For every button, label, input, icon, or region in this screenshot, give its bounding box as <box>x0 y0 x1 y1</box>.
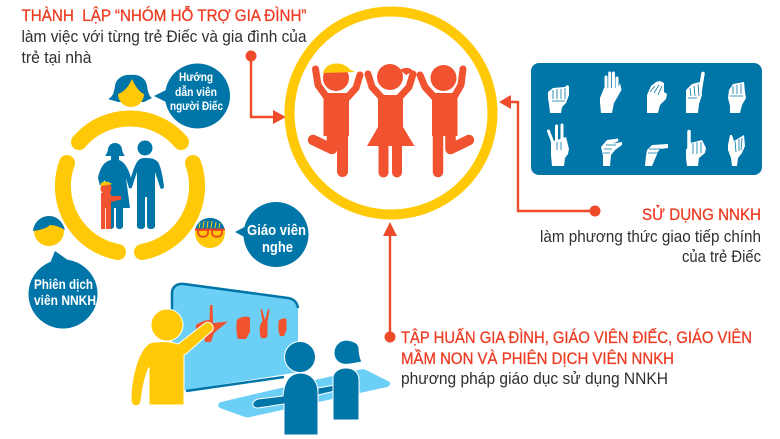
text: training: phương pháp giáo dục sử dụng NNKH <box>401 370 668 388</box>
heading: support group: THÀNH LẬP “NHÓM HỖ TRỢ GIA ĐÌNH” <box>22 6 307 25</box>
speech bubble: viên NNKH <box>34 292 96 308</box>
heading: support group: làm việc với từng trẻ Điếc và gia đình của <box>22 28 307 46</box>
panel: sign language hands <box>531 63 762 175</box>
text: use sign language <box>540 205 761 266</box>
child figure <box>100 182 121 229</box>
training scene <box>131 284 390 435</box>
arrow: training to children <box>383 222 397 342</box>
finger details <box>552 84 743 154</box>
text: use sign language: làm phương thức giao tiếp chính <box>540 228 761 246</box>
speech bubble: Giáo viên <box>247 222 306 239</box>
text: use sign language: của trẻ Điếc <box>682 248 761 266</box>
board <box>172 284 298 392</box>
person: hearing teacher with speech bubble <box>195 202 308 267</box>
child with cap <box>313 63 360 172</box>
yellow teacher <box>131 309 213 406</box>
text: training: MẦM NON VÀ PHIÊN DỊCH VIÊN NNKH <box>401 349 674 368</box>
blue student <box>253 342 335 435</box>
arrow: support group to children <box>246 50 286 124</box>
icon: signs on board <box>196 305 286 342</box>
heading: support group <box>22 6 307 67</box>
speech bubble: Hướng <box>179 72 213 84</box>
speech bubble: dẫn viên <box>175 86 217 99</box>
person: deaf instructor with speech bubble <box>108 64 230 128</box>
girl <box>367 64 414 172</box>
speech bubble <box>154 64 230 128</box>
arrow: sign language to children <box>499 95 600 216</box>
text: use sign language: SỬ DỤNG NNKH <box>642 205 761 224</box>
big yellow ring with children <box>290 12 492 214</box>
person: interpreter with speech bubble <box>28 216 98 328</box>
icon: parents and child <box>98 140 164 229</box>
blue student with hair <box>333 340 362 420</box>
speech bubble <box>235 202 308 267</box>
speech bubble <box>28 251 98 328</box>
speech bubble: nghe <box>262 239 293 256</box>
speech bubble: người Điếc <box>170 101 224 113</box>
speech bubble: Phiên dịch <box>34 276 93 292</box>
heading: support group: trẻ tại nhà <box>22 49 92 67</box>
table <box>218 369 390 417</box>
small ring with family <box>63 118 197 252</box>
text: training <box>401 328 752 388</box>
child right <box>420 65 469 172</box>
icon: hands <box>548 73 746 166</box>
